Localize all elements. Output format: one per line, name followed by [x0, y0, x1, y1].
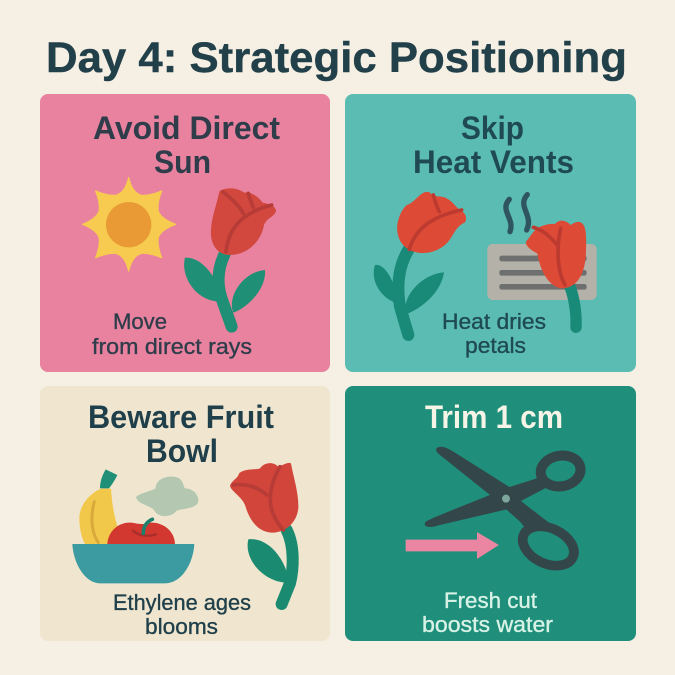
caption: move from direct rays: from direct rays: [92, 334, 252, 359]
icon: tulip: [230, 463, 298, 604]
heading: skip heat vents: Heat Vents: [413, 144, 574, 180]
heading: avoid direct sun: Avoid Direct: [93, 110, 280, 146]
icon: tulip left: [374, 192, 466, 335]
caption: fresh cut boosts water: [422, 588, 553, 637]
icon: tulip over vent: [526, 221, 586, 327]
heading: skip heat vents: [413, 110, 574, 180]
icon: sun: [83, 178, 176, 271]
icon: ethylene gas cloud: [136, 477, 198, 516]
icon: heat vent with steam: [487, 195, 597, 300]
panel: skip heat vents: [345, 94, 636, 372]
heading: avoid direct sun: [93, 110, 280, 180]
caption: heat dries petals: petals: [465, 333, 526, 358]
title: Day 4: Strategic Positioning: [46, 34, 627, 82]
heading: skip heat vents: Skip: [461, 110, 524, 146]
panel: beware fruit bowl: [40, 386, 330, 641]
caption: heat dries petals: Heat dries: [442, 309, 546, 334]
heading: beware fruit bowl: [88, 399, 274, 469]
caption: fresh cut boosts water: boosts water: [422, 612, 553, 637]
heading: trim 1 cm: Trim 1 cm: [425, 399, 563, 435]
heading: avoid direct sun: Sun: [154, 144, 211, 180]
caption: fresh cut boosts water: Fresh cut: [444, 588, 537, 613]
caption: ethylene ages blooms: [113, 590, 251, 639]
icon: tulip: [184, 188, 276, 327]
arrow: pink: [406, 533, 498, 558]
caption: ethylene ages blooms: Ethylene ages: [113, 590, 251, 615]
caption: heat dries petals: [442, 309, 546, 358]
caption: move from direct rays: Move: [113, 309, 167, 334]
icon: scissors: [425, 447, 583, 573]
icon: fruit bowl: [72, 469, 194, 583]
heading: beware fruit bowl: Beware Fruit: [88, 399, 274, 435]
panel: avoid direct sun: [40, 94, 330, 372]
panel: trim 1 cm: [345, 386, 636, 641]
heading: beware fruit bowl: Bowl: [146, 433, 218, 469]
caption: ethylene ages blooms: blooms: [145, 614, 218, 639]
caption: move from direct rays: [92, 309, 252, 359]
